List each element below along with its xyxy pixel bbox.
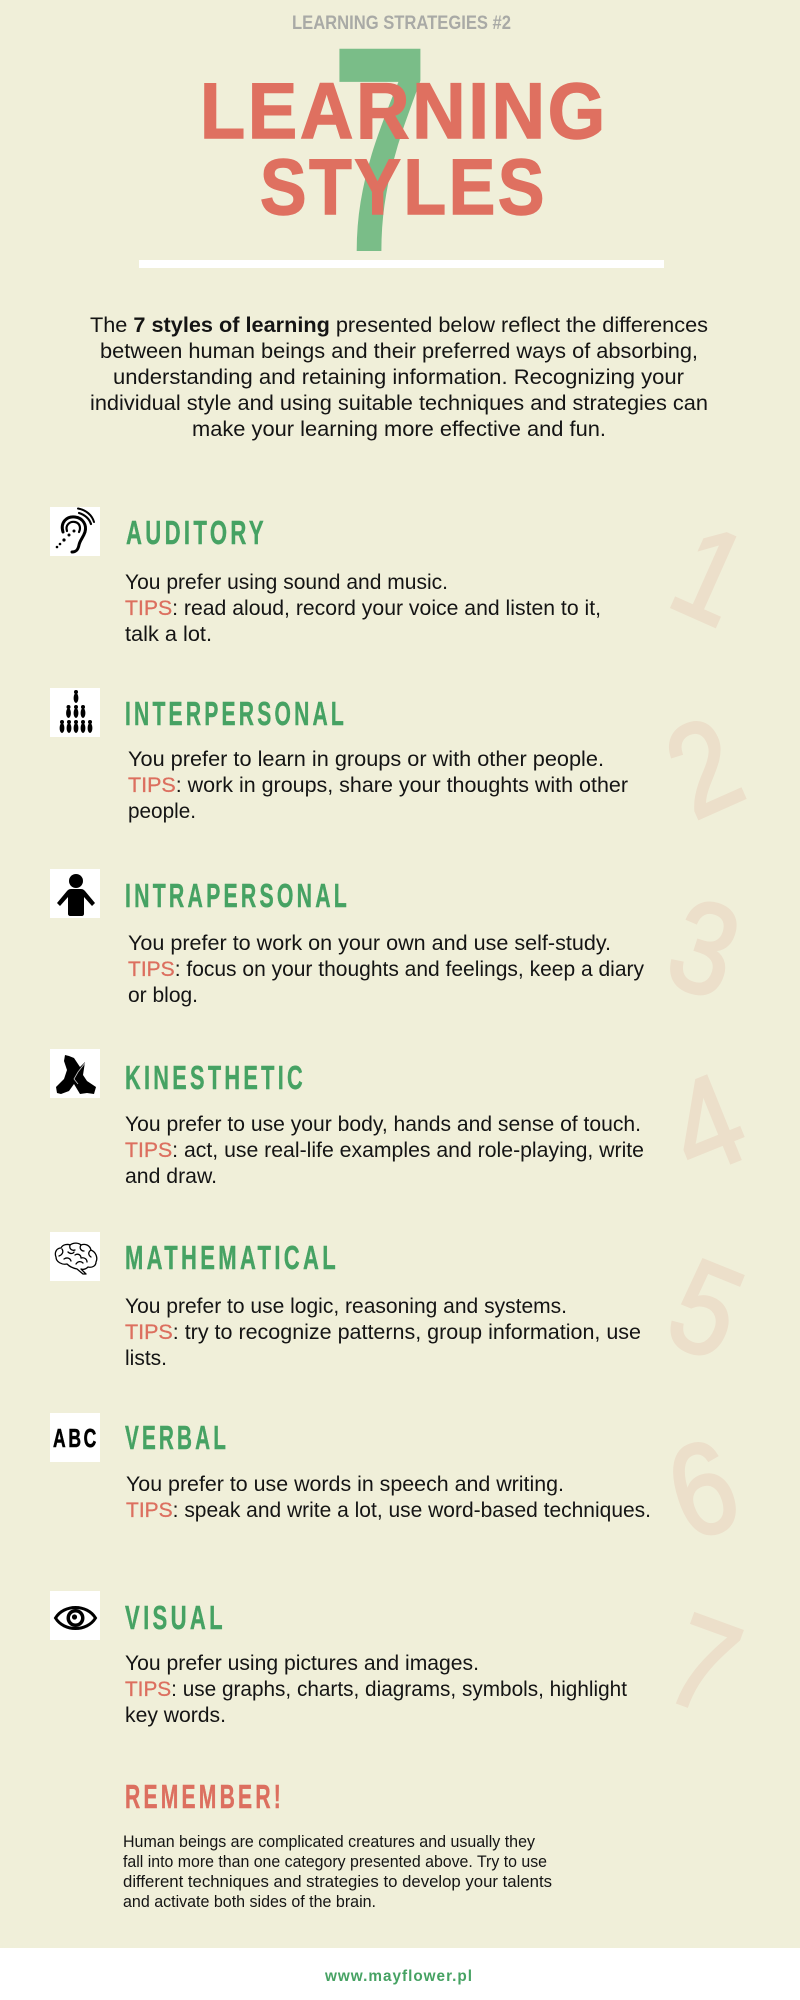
intro paragraph [90, 314, 708, 441]
panel: kinesthetic [50, 1049, 644, 1188]
description: key words. [125, 1704, 226, 1727]
remember text: different techniques and strategies to develop your talents [123, 1872, 552, 1891]
website: www.mayflower.pl [324, 1968, 473, 1985]
icon: abc [50, 1413, 100, 1462]
icon: hands [50, 1049, 100, 1098]
description: lists. [125, 1347, 167, 1370]
description: You prefer using pictures and images. [125, 1652, 479, 1675]
panel: verbal [50, 1413, 651, 1522]
heading: KINESTHETIC [125, 1059, 306, 1096]
description: You prefer to use logic, reasoning and systems. [125, 1295, 567, 1318]
icon: ear [50, 507, 100, 556]
remember text: fall into more than one category presented above. Try to use [123, 1852, 547, 1871]
decorative number 7: 7 [649, 1585, 757, 1743]
description [128, 748, 628, 823]
description: or blog. [128, 984, 198, 1007]
icon: group pyramid [50, 688, 100, 737]
heading: MATHEMATICAL [125, 1239, 339, 1276]
intro paragraph: between human beings and their preferred ways of absorbing, [100, 340, 698, 363]
description: TIPS: try to recognize patterns, group information, use [125, 1321, 641, 1344]
description: You prefer to learn in groups or with other people. [128, 748, 604, 771]
remember text: and activate both sides of the brain. [123, 1892, 376, 1911]
heading: AUDITORY [126, 514, 267, 551]
white title rule [139, 260, 664, 268]
description: talk a lot. [125, 623, 212, 646]
icon: abc: ABC [53, 1423, 99, 1453]
description: You prefer using sound and music. [125, 571, 448, 594]
description: You prefer to use words in speech and writing. [126, 1473, 564, 1496]
decorative number 4: 4 [650, 1045, 764, 1204]
icon: brain [50, 1232, 100, 1281]
heading: VISUAL [125, 1599, 226, 1636]
description: and draw. [125, 1165, 217, 1188]
description: You prefer to use your body, hands and sense of touch. [125, 1113, 641, 1136]
description: people. [128, 800, 196, 823]
description [125, 1652, 627, 1727]
intro paragraph: individual style and using suitable techniques and strategies can [90, 392, 708, 415]
remember text: Human beings are complicated creatures and usually they [123, 1832, 535, 1851]
panel: intrapersonal [50, 869, 644, 1007]
heading: INTRAPERSONAL [125, 877, 350, 914]
panel: interpersonal [50, 688, 628, 823]
description: TIPS: work in groups, share your thoughts with other [128, 774, 628, 797]
icon: eye [50, 1591, 100, 1640]
description: TIPS: read aloud, record your voice and listen to it, [125, 597, 601, 620]
description [125, 1295, 641, 1370]
remember text [123, 1832, 552, 1911]
title line: learning: LEARNING [200, 66, 608, 155]
description: You prefer to work on your own and use self-study. [128, 932, 611, 955]
decorative number 5: 5 [651, 1230, 762, 1388]
top label: LEARNING STRATEGIES #2 [292, 13, 511, 34]
title block [200, 0, 608, 314]
intro paragraph: make your learning more effective and fun. [192, 418, 606, 441]
description [125, 571, 601, 646]
decorative number 3: 3 [653, 870, 756, 1027]
description [126, 1473, 651, 1522]
description: TIPS: focus on your thoughts and feelings, keep a diary [128, 958, 644, 981]
heading: INTERPERSONAL [125, 695, 347, 732]
description: TIPS: act, use real-life examples and role-playing, write [125, 1139, 644, 1162]
heading: REMEMBER! [125, 1778, 284, 1815]
icon: single person [50, 869, 100, 918]
decorative number 2: 2 [646, 688, 761, 846]
heading: VERBAL [125, 1419, 229, 1456]
description: TIPS: use graphs, charts, diagrams, symbols, highlight [125, 1678, 627, 1701]
panel: visual [50, 1591, 627, 1727]
panel: mathematical [50, 1232, 641, 1370]
description [128, 932, 644, 1007]
description [125, 1113, 644, 1188]
decorative number 1: 1 [653, 496, 768, 654]
footer [0, 1948, 800, 2000]
intro paragraph: The 7 styles of learning presented below reflect the differences [90, 314, 708, 337]
intro paragraph: understanding and retaining information. Recognizing your [113, 366, 684, 389]
description: TIPS: speak and write a lot, use word-based techniques. [126, 1499, 651, 1522]
panel: remember [123, 1778, 552, 1911]
title line: styles: STYLES [260, 142, 547, 231]
panel: auditory [50, 507, 601, 646]
decorative number 6: 6 [651, 1411, 754, 1568]
